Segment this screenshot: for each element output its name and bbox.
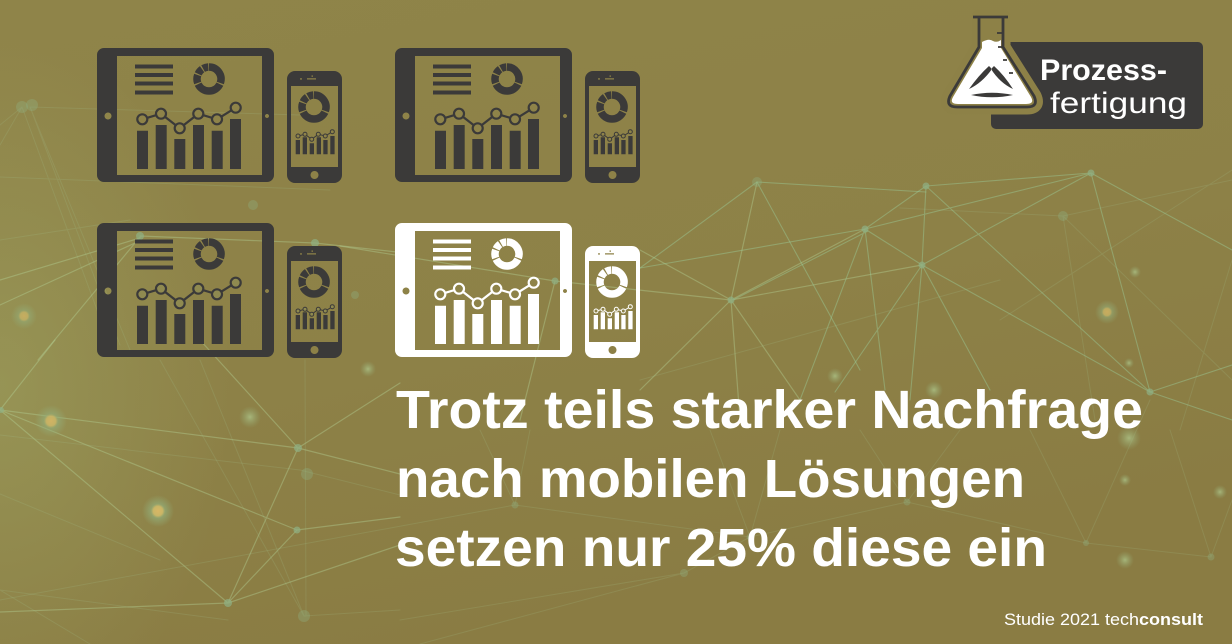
headline: setzen nur 25% diese ein	[395, 518, 1047, 578]
badge panel	[991, 42, 1203, 129]
tablet 4 (white, highlighted)	[395, 223, 572, 357]
icon: flask	[949, 17, 1035, 107]
phone 3 (dark)	[287, 246, 342, 358]
category badge: Prozessfertigung: fertigung	[1050, 87, 1187, 120]
phone 2 (dark)	[585, 71, 640, 183]
category badge: Prozessfertigung	[949, 17, 1203, 129]
phone 4 (white, highlighted)	[585, 246, 640, 358]
tablet 1 (dark)	[97, 48, 274, 182]
headline: nach mobilen Lösungen	[396, 449, 1025, 509]
badge label: Prozess-	[1040, 54, 1167, 87]
headline	[395, 380, 1143, 578]
headline: Trotz teils starker Nachfrage	[396, 380, 1143, 440]
source credit: Studie 2021 tech consult	[1004, 611, 1204, 629]
tablet 2 (dark)	[395, 48, 572, 182]
tablet 3 (dark)	[97, 223, 274, 357]
phone 1 (dark)	[287, 71, 342, 183]
